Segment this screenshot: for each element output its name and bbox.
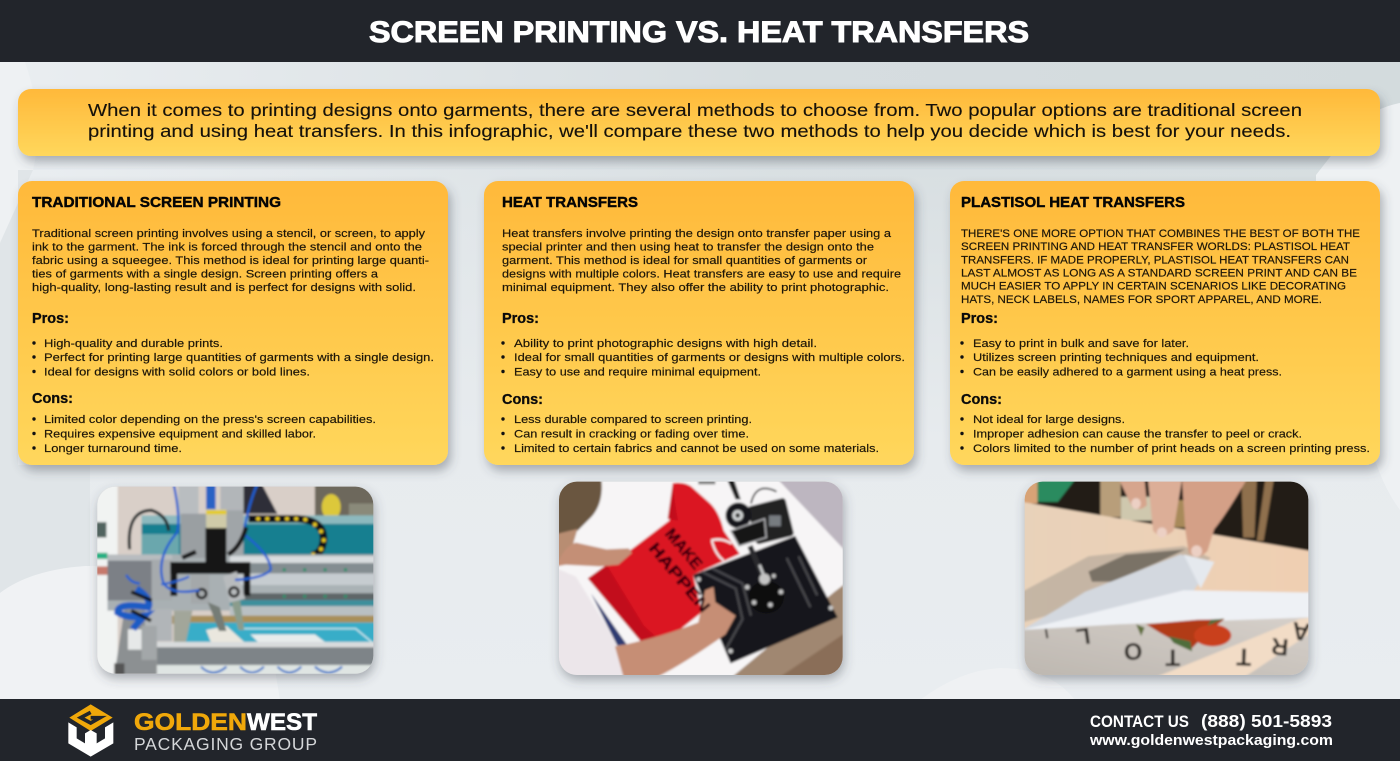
pros list: Perfect for printing large quantities of garments with a single design. <box>44 352 434 364</box>
pros list: Utilizes screen printing techniques and equipment. <box>973 352 1259 364</box>
description <box>502 228 901 294</box>
shirt lettering: HAPPEN <box>645 539 713 616</box>
cons list <box>501 414 879 455</box>
pros list: Easy to use and require minimal equipment. <box>514 366 761 378</box>
pros list: Ideal for small quantities of garments or designs with multiple colors. <box>514 352 905 364</box>
cons list: Limited color depending on the press's screen capabilities. <box>44 414 376 426</box>
intro text: When it comes to printing designs onto garments, there are several methods to choose from. Two popular options are traditional screen <box>88 100 1302 120</box>
photo: screen printing machine <box>95 485 376 676</box>
pros heading: Pros: <box>961 311 998 327</box>
description <box>961 228 1360 306</box>
cons list <box>960 414 1370 455</box>
contact details: CONTACT US <box>1090 713 1189 731</box>
upside-down garment lettering: L <box>1074 623 1092 650</box>
pros list <box>501 338 905 378</box>
cons list: Not ideal for large designs. <box>973 414 1125 426</box>
cons heading: Cons: <box>502 392 543 408</box>
pros list: Ideal for designs with solid colors or bold lines. <box>44 366 310 378</box>
upside-down garment lettering: T <box>1236 643 1252 670</box>
description: THERE'S ONE MORE OPTION THAT COMBINES THE BEST OF BOTH THE <box>961 228 1360 240</box>
description: TRANSFERS. IF MADE PROPERLY, PLASTISOL HEAT TRANSFERS CAN <box>961 254 1349 266</box>
contact details: www.goldenwestpackaging.com <box>1089 732 1333 749</box>
panel: plastisol heat transfers <box>950 181 1380 465</box>
pros list: Can be easily adhered to a garment using a heat press. <box>973 366 1282 378</box>
upside-down garment lettering: R <box>1270 632 1290 660</box>
intro banner <box>18 89 1380 156</box>
cons list: Requires expensive equipment and skilled labor. <box>44 428 316 440</box>
shirt lettering <box>648 526 712 614</box>
panel: traditional screen printing <box>18 181 448 465</box>
logo wordmark <box>134 709 317 754</box>
description: fabric using a squeegee. This method is ideal for printing large quanti- <box>32 255 429 267</box>
heading: heat transfers: HEAT TRANSFERS <box>502 195 638 211</box>
cons list: Limited to certain fabrics and cannot be used on some materials. <box>514 443 879 455</box>
pros heading: Pros: <box>502 311 539 327</box>
photo: heat press and red shirt <box>556 480 846 677</box>
logo icon <box>68 704 113 757</box>
cons heading: Cons: <box>32 391 73 407</box>
pros list <box>960 338 1282 378</box>
pros list: High-quality and durable prints. <box>44 338 223 350</box>
cons heading: Cons: <box>961 392 1002 408</box>
contact details <box>1089 711 1333 749</box>
heading: plastisol heat transfers: PLASTISOL HEAT TRANSFERS <box>961 195 1185 211</box>
logo wordmark: PACKAGING GROUP <box>134 734 317 754</box>
shirt lettering: MAKE <box>661 525 706 573</box>
cons list: Can result in cracking or fading over time. <box>514 428 749 440</box>
upside-down garment lettering: T <box>1165 644 1180 671</box>
upside-down garment lettering <box>1044 620 1308 668</box>
description: minimal equipment. They also offer the ability to print photographic. <box>502 282 889 294</box>
title: SCREEN PRINTING VS. HEAT TRANSFERS <box>369 16 1029 49</box>
description: ink to the garment. The ink is forced through the stencil and onto the <box>32 242 422 254</box>
description: SCREEN PRINTING AND HEAT TRANSFER WORLDS: PLASTISOL HEAT <box>961 241 1350 253</box>
description: ties of garments with a single design. Screen printing offers a <box>32 268 379 280</box>
pros heading: Pros: <box>32 311 69 327</box>
description: designs with multiple colors. Heat transfers are easy to use and require <box>502 268 901 280</box>
description: Traditional screen printing involves using a stencil, or screen, to apply <box>32 228 425 240</box>
cons list: Longer turnaround time. <box>44 443 182 455</box>
description: garment. This method is ideal for small quantities of garments or <box>502 255 867 267</box>
contact details: (888) 501-5893 <box>1201 711 1332 731</box>
description: Heat transfers involve printing the design onto transfer paper using a <box>502 228 892 240</box>
description: LAST ALMOST AS LONG AS A STANDARD SCREEN PRINT AND CAN BE <box>961 268 1357 280</box>
description: high-quality, long-lasting result and is perfect for designs with solid. <box>32 282 416 294</box>
logo wordmark: WEST <box>247 709 317 736</box>
cons list: Improper adhesion can cause the transfer to peel or crack. <box>973 428 1302 440</box>
pros list <box>32 338 434 378</box>
description <box>32 228 429 294</box>
photo: peeling plastisol transfer <box>1022 480 1312 677</box>
upside-down garment lettering: A <box>1290 616 1312 646</box>
description: HATS, NECK LABELS, NAMES FOR SPORT APPAREL, AND MORE. <box>961 294 1322 306</box>
cons list: Less durable compared to screen printing. <box>514 414 752 426</box>
description: special printer and then using heat to transfer the design onto the <box>502 242 874 254</box>
pros list: Easy to print in bulk and save for later. <box>973 338 1189 350</box>
upside-down garment lettering: O <box>1123 637 1143 665</box>
panel: heat transfers <box>484 181 914 465</box>
logo <box>68 704 317 757</box>
description: MUCH EASIER TO APPLY IN CERTAIN SCENARIOS LIKE DECORATING <box>961 281 1346 293</box>
upside-down garment lettering: I <box>1043 626 1050 641</box>
pros list: Ability to print photographic designs with high detail. <box>514 338 817 350</box>
footer bar <box>0 699 1400 761</box>
logo wordmark: GOLDEN <box>134 709 247 736</box>
heading: traditional screen printing: TRADITIONAL SCREEN PRINTING <box>32 195 281 211</box>
intro text <box>88 100 1302 141</box>
cons list <box>32 414 376 455</box>
cons list: Colors limited to the number of print heads on a screen printing press. <box>973 443 1370 455</box>
intro text: printing and using heat transfers. In this infographic, we'll compare these two methods to help you decide which is best for your needs. <box>88 121 1291 141</box>
title bar <box>0 0 1400 62</box>
